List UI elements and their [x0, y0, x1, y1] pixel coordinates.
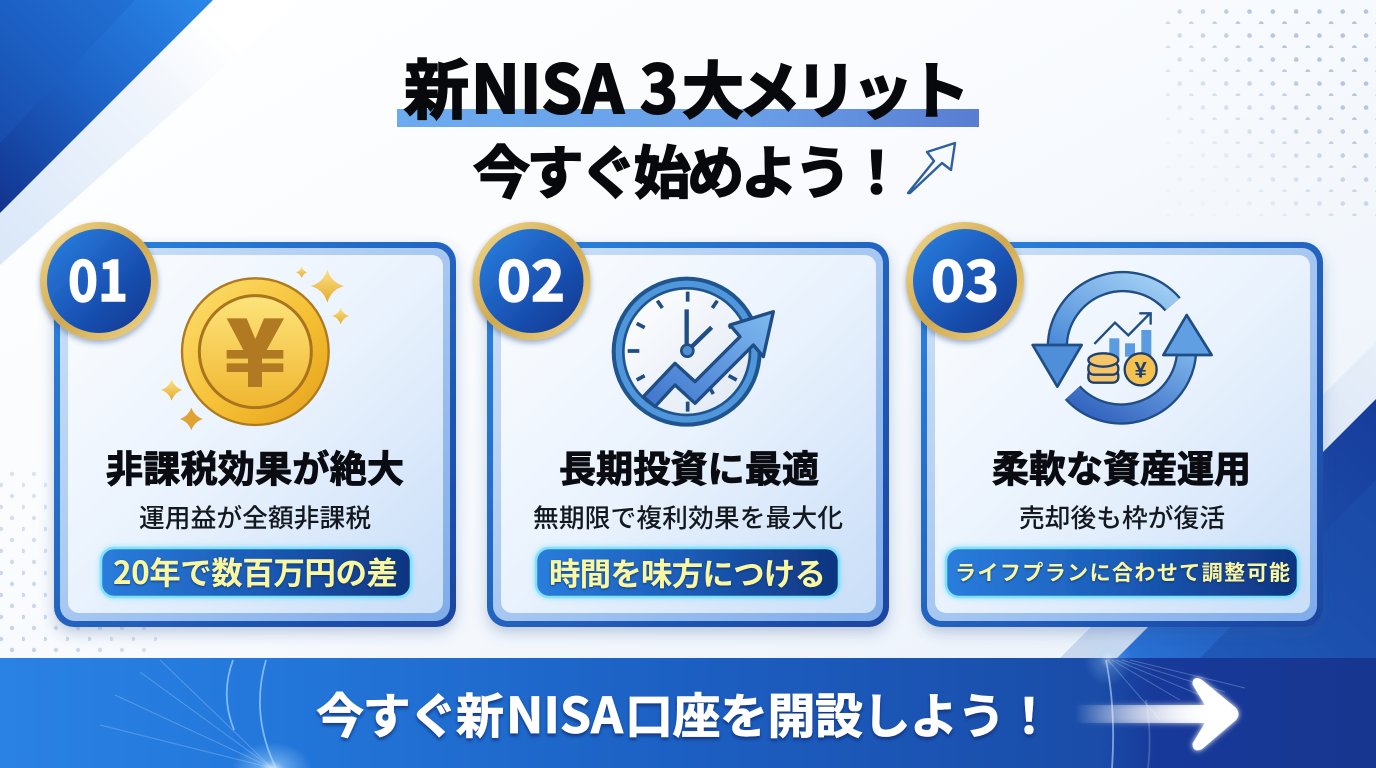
banner text	[316, 677, 1053, 748]
number badge 01	[40, 222, 158, 340]
icon: asset cycle: ¥	[1135, 357, 1148, 382]
banner text: NISA	[506, 677, 624, 748]
banner text: 口座を開設しよう！	[625, 677, 1053, 747]
panel: merit 1	[40, 222, 456, 627]
callout: 時間を味方につける	[549, 549, 826, 595]
number badge 03	[906, 222, 1024, 340]
card frame 2	[487, 242, 889, 627]
number badge 01: 01	[68, 237, 128, 317]
title: 大メリット	[682, 41, 970, 131]
callout: 20年で数百万円の差	[113, 548, 398, 594]
card frame 1	[54, 242, 456, 627]
call to action banner	[0, 634, 1376, 768]
title: NISA	[471, 37, 625, 133]
icon: white arrow	[1075, 680, 1237, 749]
icon: asset cycle	[1033, 282, 1212, 414]
description: 運用益が全額非課税	[139, 498, 371, 535]
banner text: 今すぐ新	[316, 677, 504, 747]
title	[397, 37, 979, 133]
panel: merit 3	[906, 222, 1323, 627]
heading: 非課税効果が絶大	[106, 439, 404, 493]
title: 3	[640, 37, 678, 133]
number badge 02	[472, 222, 590, 340]
card frame 3	[921, 242, 1323, 627]
title: 新	[404, 38, 469, 132]
number badge 03: 03	[931, 237, 999, 317]
heading: 長期投資に最適	[559, 439, 819, 493]
heading: 柔軟な資産運用	[992, 439, 1251, 493]
icon: clock with rising arrow	[612, 277, 773, 427]
callout	[946, 548, 1298, 597]
panel: merit 2	[472, 222, 889, 627]
callout: ライフプランに合わせて調整可能	[955, 557, 1290, 587]
number badge 02: 02	[497, 237, 565, 317]
description: 売却後も枠が復活	[1019, 498, 1225, 535]
icon: upward arrow	[908, 143, 955, 193]
subtitle: 今すぐ始めよう！	[473, 128, 905, 210]
icon: gold yen coin with sparkles	[161, 267, 349, 430]
description: 無期限で複利効果を最大化	[533, 498, 843, 535]
